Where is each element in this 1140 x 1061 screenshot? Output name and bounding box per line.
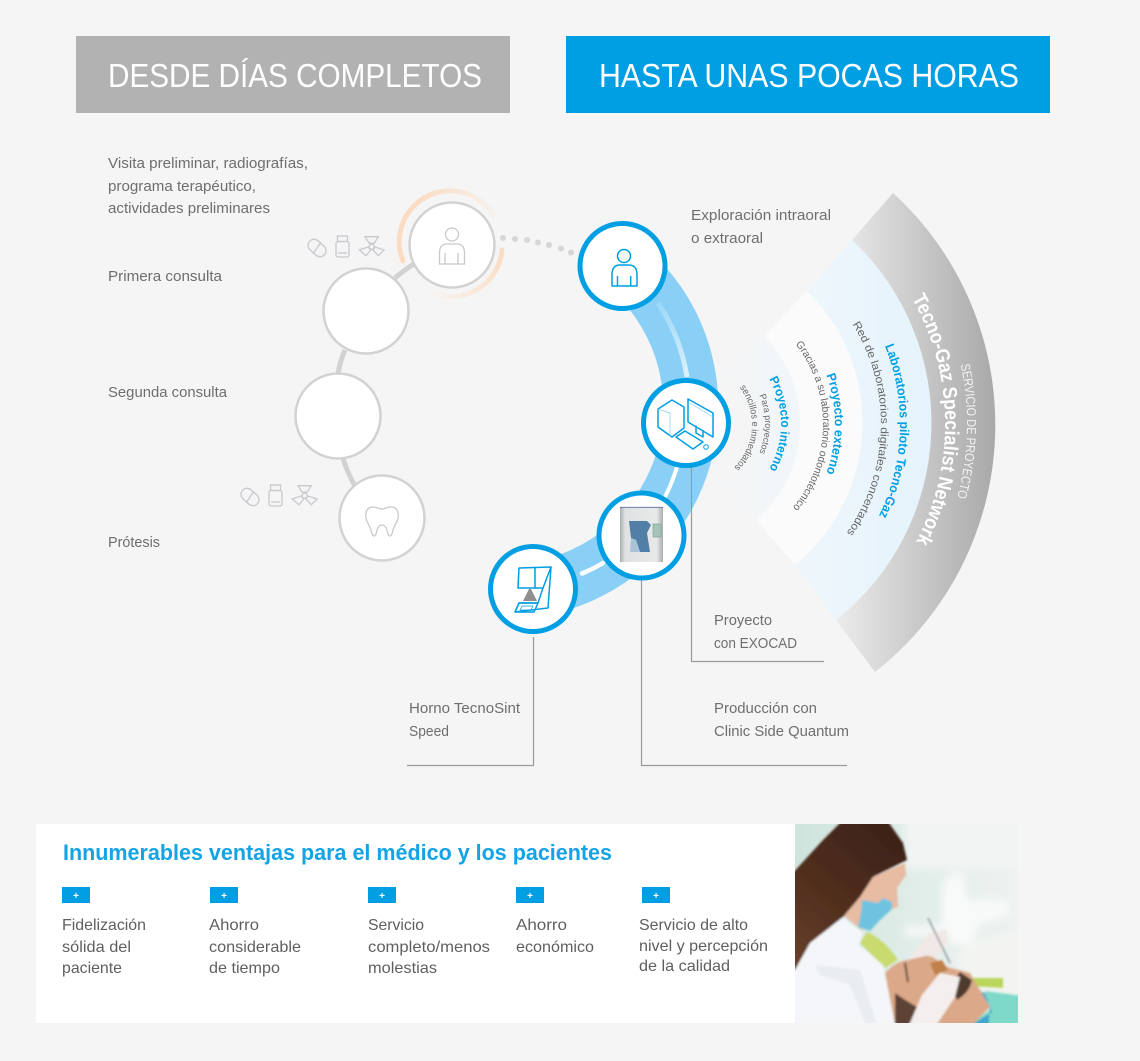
label: primera consulta: Primera consulta (108, 268, 223, 285)
label: proyecto con exocad: Proyecto (714, 612, 772, 629)
advantage: servicio de alto nivel (639, 887, 768, 975)
fan diagram: service levels (734, 193, 996, 672)
band: proyecto externo: Gracias a su laboratorio odontotécnico (794, 341, 830, 510)
circle: primera consulta (324, 268, 408, 354)
step: clinic side quantum machine (599, 493, 684, 578)
label: producción: Producción con (714, 700, 817, 717)
advantage: fidelización: paciente (62, 960, 122, 977)
band: proyecto interno: sencillos e inmediatos (734, 385, 758, 470)
hair (795, 824, 908, 971)
face (843, 863, 906, 930)
orange ring (399, 191, 502, 297)
band: laboratorios piloto (816, 240, 932, 620)
label: prótesis: Prótesis (108, 534, 160, 551)
advantage: ahorro económico: Ahorro (516, 917, 567, 934)
band: proyecto interno: Proyecto interno (770, 376, 790, 471)
dental tool (928, 918, 950, 963)
advantage: fidelización: sólida del (62, 939, 131, 956)
coat (795, 916, 896, 1023)
text: visita preliminar: programa terapéutico, (108, 178, 256, 195)
patient (884, 954, 991, 1023)
band: proyecto externo: Proyecto externo (826, 372, 844, 474)
drape (975, 990, 1018, 1023)
band: laboratorios piloto: Laboratorios piloto Tecno-Gaz (879, 343, 910, 518)
band: proyecto interno: Para proyectos (760, 394, 770, 454)
icons: pill, bottle, radiation (lower) (239, 485, 317, 508)
heading: hasta unas pocas horas (566, 36, 1050, 113)
advantage: ahorro económico (516, 887, 594, 956)
label: proyecto con exocad (714, 612, 797, 652)
panel heading: Innumerables ventajas para el médico y los pacientes (63, 840, 612, 865)
band: laboratorios piloto: Red de laboratorios digitales concertados (848, 321, 889, 536)
photo: dentist treating a patient (795, 824, 1018, 1023)
advantage: servicio de alto nivel: + (653, 891, 659, 902)
digital workflow arc (533, 264, 691, 590)
advantage: fidelización (62, 887, 146, 977)
advantage: ahorro de tiempo: de tiempo (209, 960, 280, 977)
step: exocad computer icon (644, 380, 728, 466)
text: visita preliminar: Visita preliminar, radiografías, (108, 155, 308, 172)
circle: first step with person (410, 202, 494, 288)
label: producción (714, 700, 849, 740)
advantage: fidelización: + (73, 891, 79, 902)
panel: ventajas (36, 824, 795, 1023)
text: visita preliminar (108, 155, 308, 217)
advantage: servicio de alto nivel: nivel y percepción (639, 938, 768, 955)
leader lines (407, 465, 847, 766)
band: tecno-gaz specialist network: SERVICIO DE PROYECTO (958, 364, 976, 498)
advantage: servicio de alto nivel: de la calidad (639, 958, 730, 975)
advantage: servicio de alto nivel: Servicio de alto (639, 917, 748, 934)
heading: desde días completos: DESDE DÍAS COMPLETOS (108, 57, 482, 94)
label: exploración: Exploración intraoral (691, 207, 831, 224)
connectors (338, 264, 414, 486)
circle: prótesis with tooth (340, 476, 424, 560)
advantage: ahorro de tiempo: considerable (209, 939, 301, 956)
band: proyecto interno (734, 376, 790, 471)
traditional workflow chain (296, 191, 502, 560)
advantage: servicio completo: + (379, 891, 385, 902)
gloves (908, 930, 947, 960)
chair headrest (860, 932, 898, 968)
step: tecnosint speed furnace icon (490, 546, 576, 632)
advantage: ahorro económico: + (527, 891, 533, 902)
advantage: servicio completo: completo/menos (368, 939, 490, 956)
heading: desde días completos (76, 36, 510, 113)
advantage: servicio completo (368, 887, 490, 977)
band: tecno-gaz specialist network (836, 193, 996, 672)
label: horno tecnosint (409, 700, 521, 740)
heading: hasta unas pocas horas: HASTA UNAS POCAS HORAS (599, 57, 1019, 94)
band: tecno-gaz specialist network: Tecno-Gaz Specialist Network (914, 292, 960, 546)
icons: pill, bottle, radiation (upper) (306, 236, 384, 259)
label: producción: Clinic Side Quantum (714, 723, 849, 740)
advantage: servicio completo: Servicio (368, 917, 424, 934)
text: visita preliminar: actividades preliminares (108, 200, 270, 217)
label: horno tecnosint: Speed (409, 723, 449, 740)
mask (858, 898, 892, 931)
advantage: servicio completo: molestias (368, 960, 437, 977)
advantage: fidelización: Fidelización (62, 917, 146, 934)
label: exploración: o extraoral (691, 230, 763, 247)
label: proyecto con exocad: con EXOCAD (714, 635, 797, 652)
advantage: ahorro de tiempo: + (221, 891, 227, 902)
step: intraoral scan icon (580, 224, 665, 308)
label: horno tecnosint: Horno TecnoSint (409, 700, 521, 717)
dotted connector (500, 235, 574, 256)
advantage: ahorro económico: económico (516, 939, 594, 956)
advantage: ahorro de tiempo (209, 887, 301, 977)
circle: segunda consulta (296, 374, 380, 458)
advantage: ahorro de tiempo: Ahorro (209, 917, 259, 934)
label: exploración (691, 207, 831, 247)
label: segunda consulta: Segunda consulta (108, 384, 228, 401)
